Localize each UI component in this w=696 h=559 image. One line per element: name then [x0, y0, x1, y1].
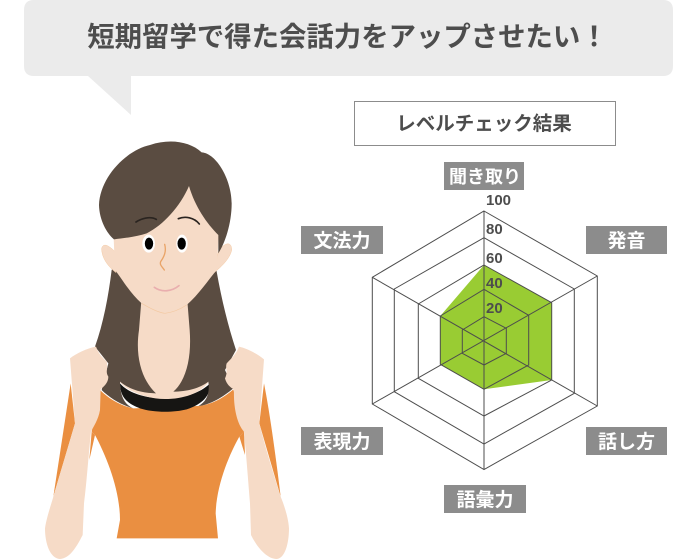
front hair — [99, 142, 232, 253]
axis label: vocabulary — [444, 485, 526, 513]
scale numbers: 80 — [486, 221, 503, 238]
title: 短期留学で得た会話力をアップさせたい！ — [87, 21, 608, 52]
eyes — [142, 235, 188, 253]
neck and chest — [120, 297, 208, 399]
axis label: speaking style: 話し方 — [598, 430, 655, 453]
collar — [120, 383, 210, 412]
speech bubble with title — [24, 0, 673, 115]
right arm and fist — [225, 347, 289, 559]
nose — [160, 244, 165, 270]
axis label: expression — [301, 427, 383, 455]
axis label: listening — [444, 162, 524, 190]
face — [113, 180, 219, 313]
long hair — [95, 263, 236, 408]
shirt — [53, 383, 281, 538]
scale numbers: 40 — [486, 275, 503, 292]
left arm and fist — [45, 347, 108, 559]
axis label: pronunciation: 発音 — [607, 230, 646, 252]
axis label: listening: 聞き取り — [449, 167, 521, 187]
scale numbers: 100 — [486, 192, 511, 209]
person illustration — [45, 142, 289, 559]
axis label: expression: 表現力 — [313, 431, 371, 453]
mouth — [154, 286, 179, 291]
axis label: grammar: 文法力 — [313, 230, 371, 252]
scale numbers — [486, 192, 511, 317]
chin outline — [142, 303, 187, 313]
axis label: pronunciation — [586, 226, 667, 254]
level check heading box — [354, 102, 616, 146]
axis label: vocabulary: 語彙力 — [456, 489, 514, 511]
axis label: speaking style — [586, 427, 667, 455]
scale numbers: 60 — [486, 250, 503, 267]
radar grid — [372, 211, 597, 470]
ears — [102, 244, 232, 273]
axis label: grammar — [301, 226, 383, 254]
scale numbers: 20 — [486, 300, 503, 317]
score area — [440, 265, 552, 389]
eyebrows — [136, 217, 199, 224]
level check heading box: レベルチェック結果 — [396, 113, 572, 135]
radar chart — [372, 192, 597, 470]
